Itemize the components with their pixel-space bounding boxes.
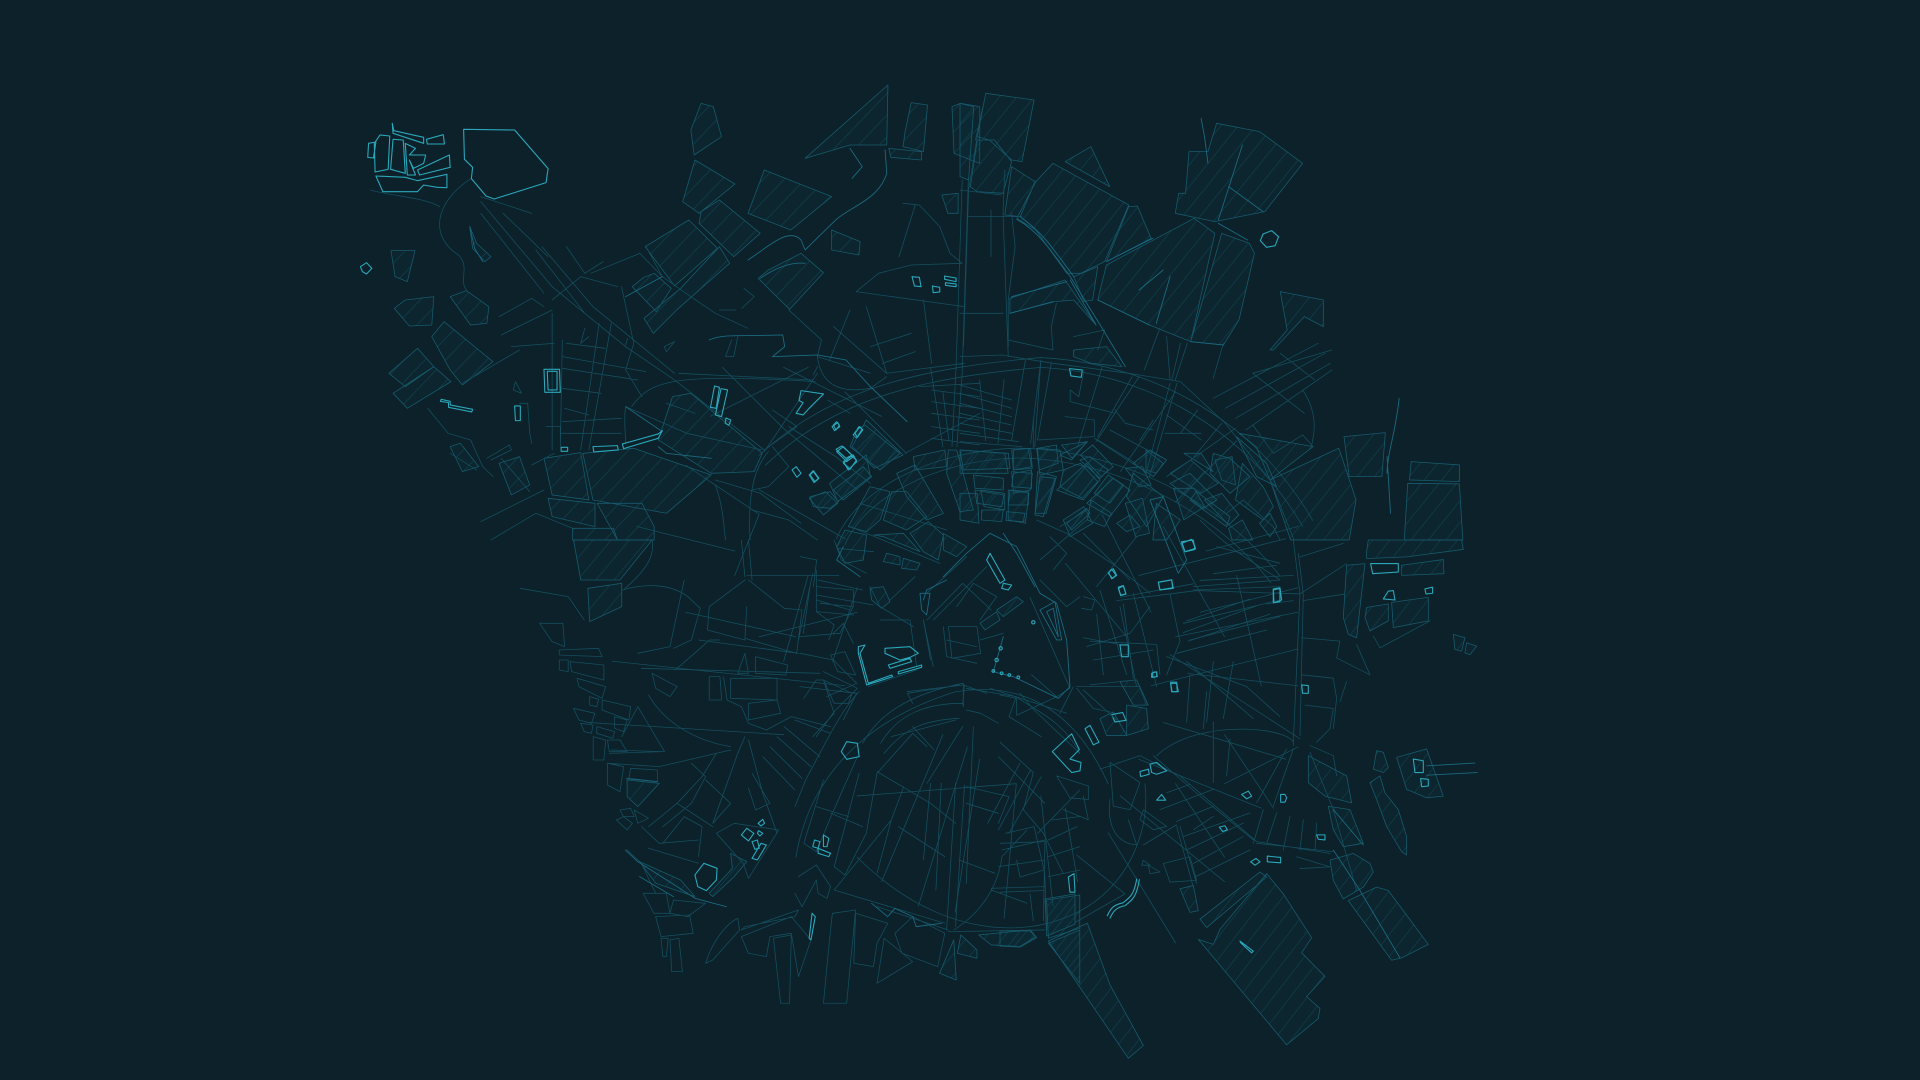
roads north-east [1010,118,1399,513]
hatched parks north-east [960,93,1463,540]
embankment and tower moat [837,497,1187,698]
streets north-east [960,93,1332,540]
streets south-east [1000,540,1430,922]
region: south-west districts [520,540,1080,1003]
streets west of river [520,540,991,1003]
tower of london dotted wall [992,621,1035,679]
canal north-west [470,148,907,458]
region: north-east districts [960,93,1463,540]
highlighted landmarks north-west [360,123,956,483]
hatched parks south-east [1000,540,1477,1058]
streets north-west [371,179,980,540]
region: north-west districts [360,85,980,540]
highlighted landmarks south-west [695,742,859,940]
region: ring roads and radials [588,358,1313,943]
thames bridge east [1333,763,1477,958]
hatched blocks central [810,425,1277,630]
hatched parks north-west [389,85,980,540]
hatched parks south-west [574,540,1080,983]
region: south-east districts [1000,540,1477,1058]
river thames banks [795,683,1080,807]
ring roads [759,358,1313,928]
streets central [800,420,1280,720]
highlighted landmarks south-east [1052,540,1433,953]
region: central city [800,420,1280,720]
embankment edge south-west [625,779,941,927]
highlighted landmarks north-east [1070,231,1279,377]
radial streets [588,361,1298,943]
highlighted landmarks central [810,422,1280,692]
streets south of river [795,693,1080,932]
